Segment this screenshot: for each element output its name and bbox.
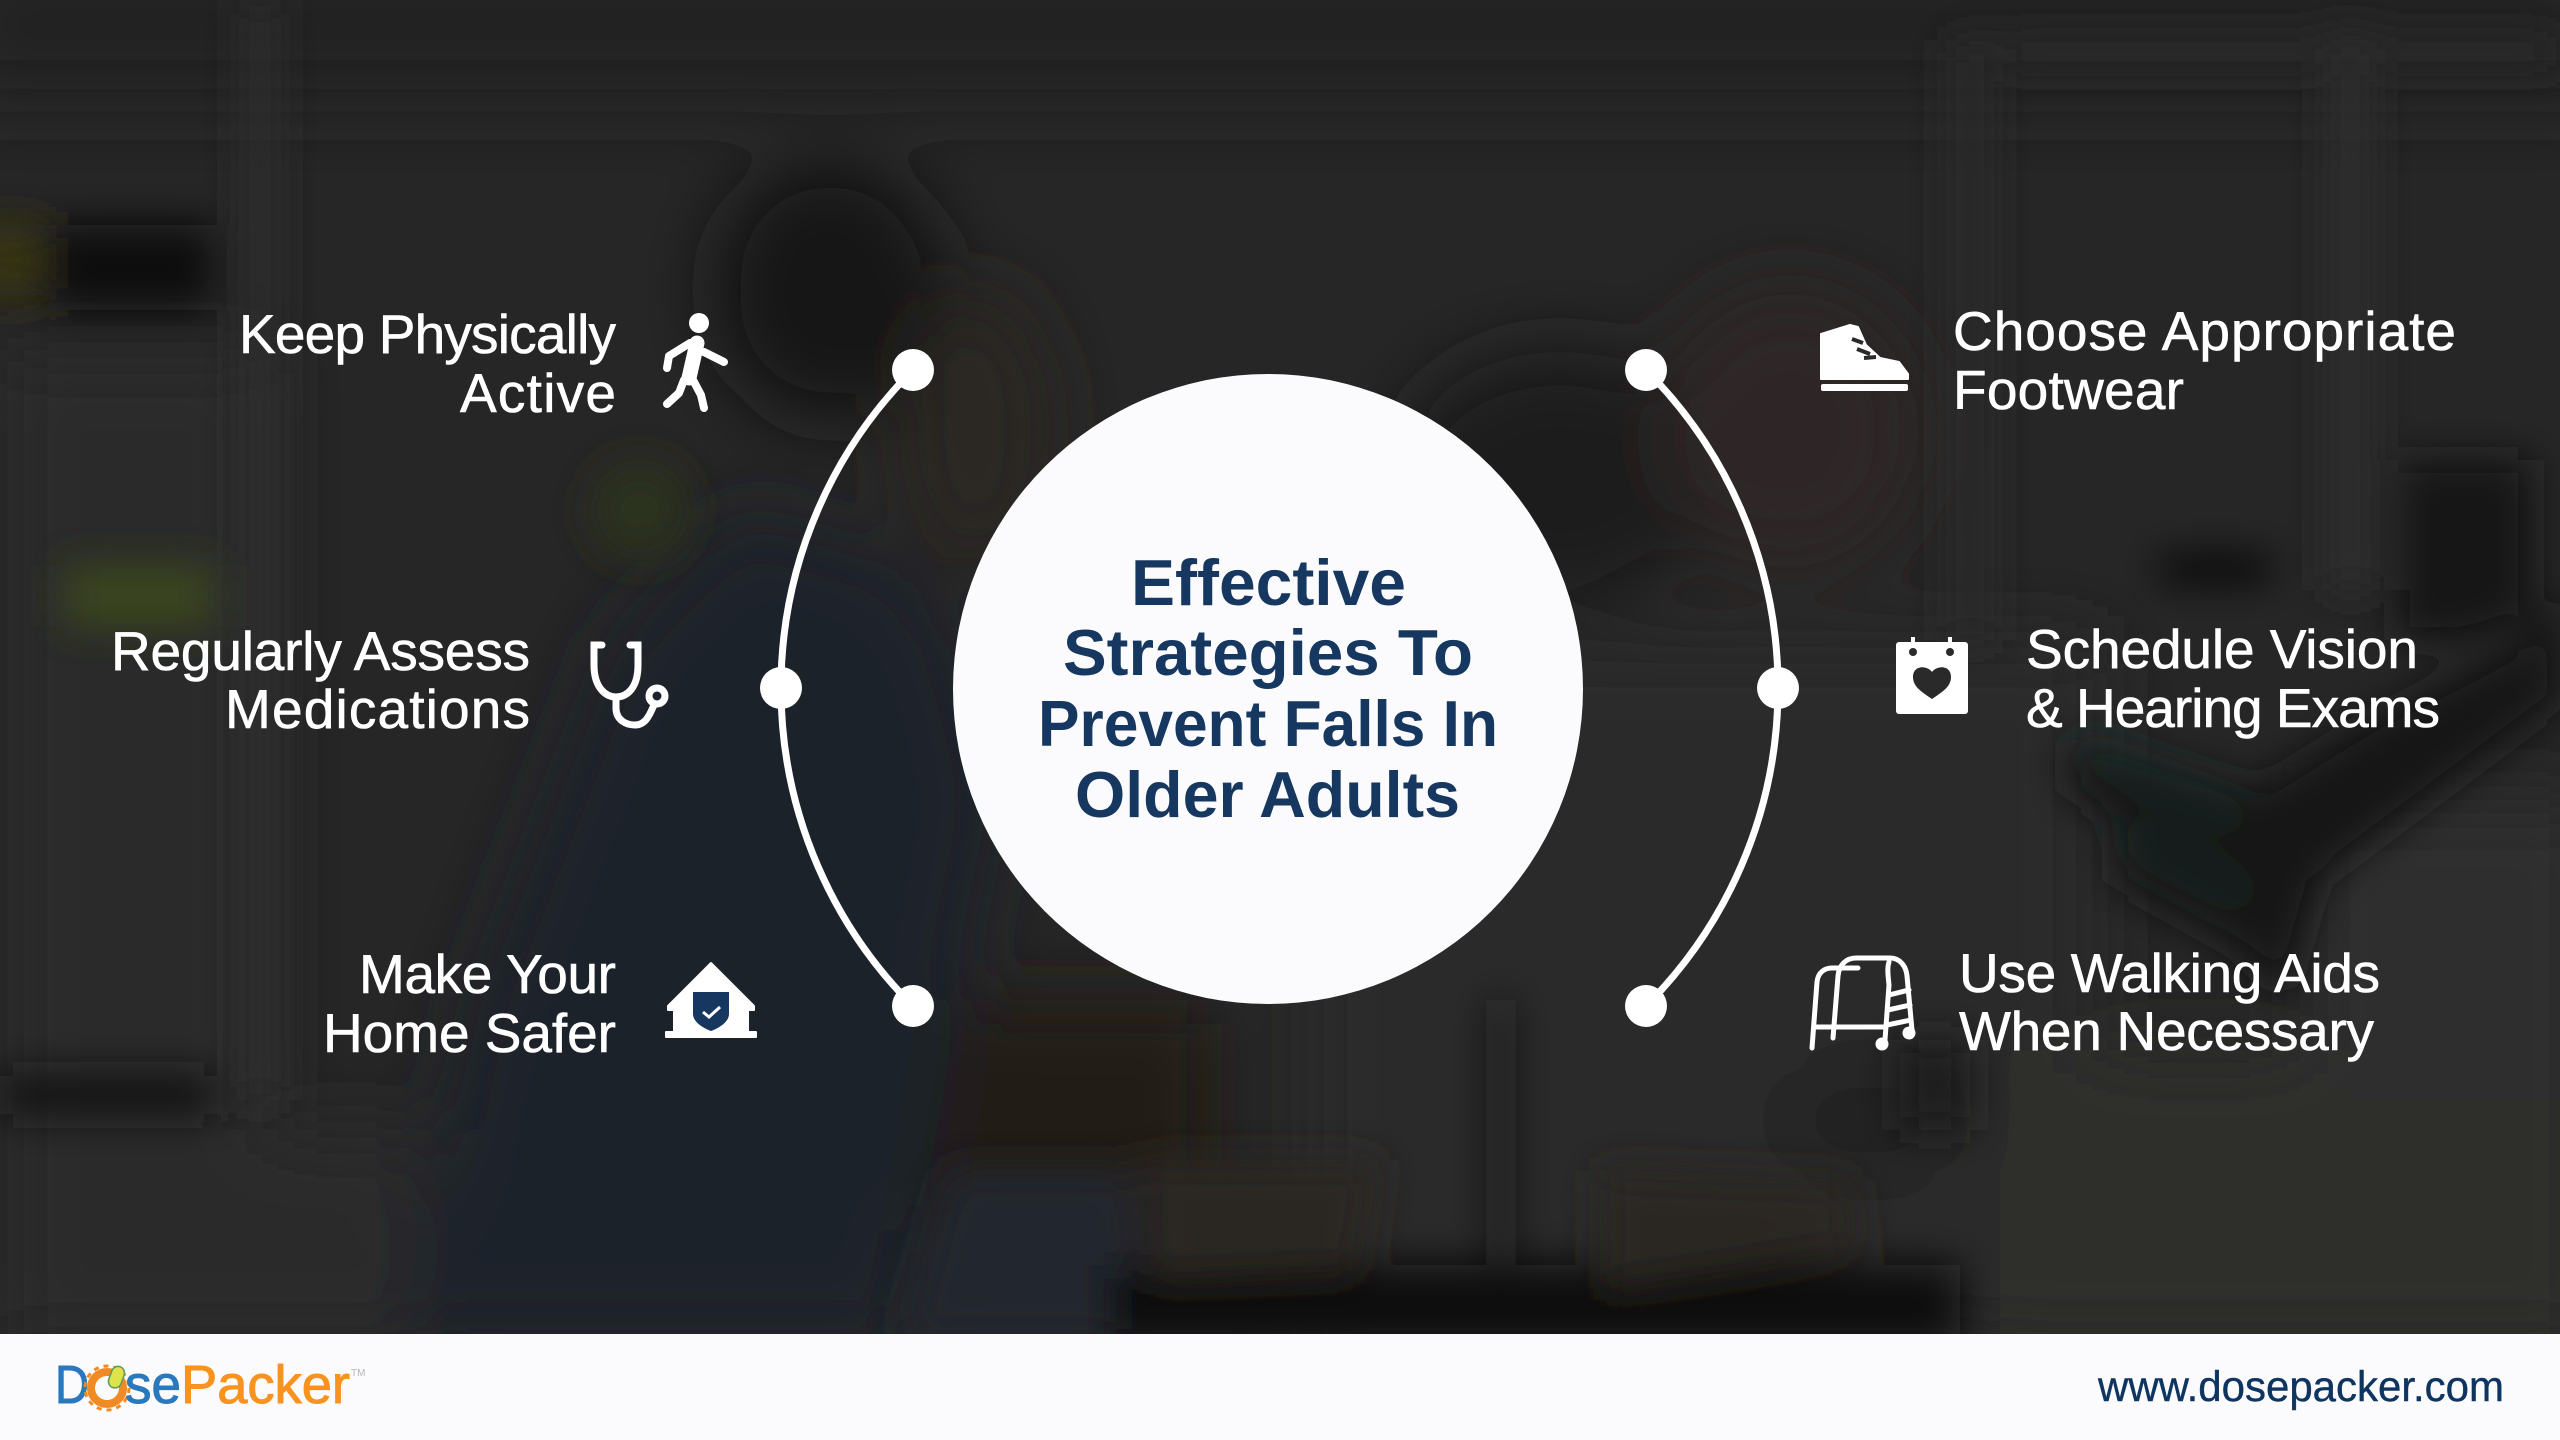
logo: DosePacker: Packer	[181, 1355, 350, 1415]
icon: walking person	[667, 313, 724, 408]
icon: gear with capsule	[85, 1365, 129, 1410]
label: make your home safer: Home Safer	[323, 1002, 616, 1064]
logo: DosePacker: TM	[351, 1368, 365, 1379]
website url: www.dosepacker.com	[2097, 1363, 2504, 1411]
label: regularly assess medications	[111, 620, 530, 740]
icon: house with shield	[666, 963, 756, 1037]
title: Effective	[1131, 546, 1406, 619]
logo: DosePacker: D	[55, 1355, 89, 1415]
label: use walking aids when necessary	[1959, 942, 2380, 1062]
label: make your home safer: Make Your	[359, 943, 616, 1005]
logo: DosePacker: se	[125, 1355, 181, 1415]
title: Older Adults	[1075, 758, 1460, 831]
label: schedule vision and hearing exams: & Hearing Exams	[2026, 677, 2440, 739]
icon: walking frame	[1812, 958, 1913, 1048]
label: keep physically active: Active	[460, 362, 616, 424]
icon: stethoscope	[594, 645, 665, 725]
label: choose appropriate footwear: Choose Appropriate	[1953, 300, 2456, 362]
title: Prevent Falls In	[1038, 687, 1498, 760]
label: regularly assess medications: Regularly Assess	[111, 620, 530, 682]
label: schedule vision and hearing exams	[2026, 618, 2440, 739]
label: choose appropriate footwear	[1953, 300, 2456, 421]
left timeline arc with three nodes	[760, 349, 934, 1027]
logo: DosePacker	[55, 1355, 365, 1415]
label: make your home safer	[323, 943, 616, 1064]
label: use walking aids when necessary: When Necessary	[1959, 1000, 2374, 1062]
label: use walking aids when necessary: Use Walking Aids	[1959, 942, 2380, 1004]
title	[1038, 546, 1498, 831]
title: Strategies To	[1063, 616, 1473, 689]
label: regularly assess medications: Medications	[225, 678, 530, 740]
icon: shoe	[1821, 325, 1908, 391]
label: keep physically active	[239, 303, 616, 424]
label: choose appropriate footwear: Footwear	[1953, 359, 2184, 421]
icon: calendar with heart	[1896, 637, 1968, 714]
right timeline arc with three nodes	[1625, 349, 1799, 1027]
central circle	[953, 374, 1583, 1004]
label: keep physically active: Keep Physically	[239, 303, 616, 365]
footer bar	[0, 1334, 2560, 1440]
label: schedule vision and hearing exams: Schedule Vision	[2026, 618, 2418, 680]
